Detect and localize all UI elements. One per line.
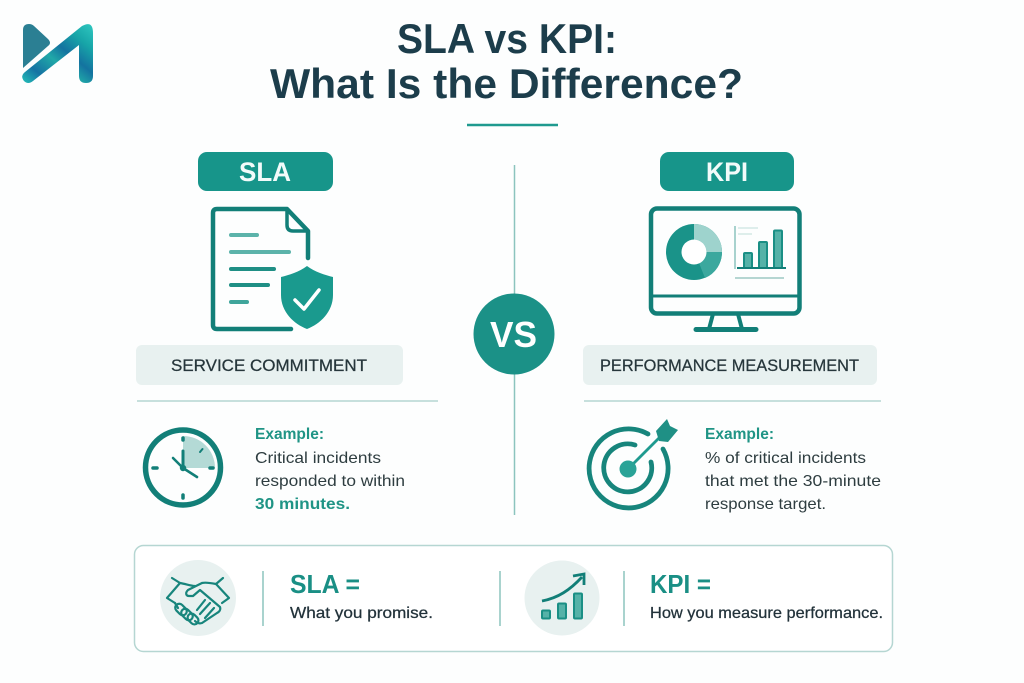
SLA definition: SLA = bbox=[290, 569, 360, 599]
icon: clock bbox=[146, 430, 220, 505]
SLA example text: Example: bbox=[255, 426, 324, 443]
KPI example text: % of critical incidents bbox=[705, 450, 866, 467]
SLA badge bbox=[198, 152, 333, 191]
KPI example text: response target. bbox=[705, 496, 826, 513]
title bbox=[270, 15, 743, 107]
icon: target with arrow bbox=[589, 419, 678, 508]
panel: summary bbox=[134, 546, 892, 652]
KPI badge bbox=[660, 152, 794, 191]
KPI badge: KPI bbox=[706, 157, 748, 187]
logo bbox=[22, 24, 93, 83]
SLA definition: What you promise. bbox=[290, 605, 433, 622]
KPI definition: KPI = bbox=[650, 569, 711, 599]
icon: growth chart bbox=[524, 560, 600, 636]
title underline bbox=[467, 124, 558, 126]
panel: SLA bbox=[136, 152, 438, 513]
label: service commitment: SERVICE COMMITMENT bbox=[171, 357, 367, 375]
KPI definition bbox=[650, 569, 883, 622]
title: What Is the Difference? bbox=[270, 60, 743, 107]
title: SLA vs KPI: bbox=[397, 15, 617, 62]
KPI example text: that met the 30-minute bbox=[705, 473, 881, 490]
KPI example text bbox=[705, 426, 881, 513]
SLA example text: Critical incidents bbox=[255, 450, 381, 467]
KPI definition: How you measure performance. bbox=[650, 605, 883, 622]
label: performance measurement bbox=[583, 345, 877, 385]
VS badge bbox=[474, 294, 554, 374]
SLA example text: 30 minutes. bbox=[255, 496, 350, 513]
label: performance measurement: PERFORMANCE MEASUREMENT bbox=[600, 357, 859, 375]
SLA example text: responded to within bbox=[255, 473, 405, 490]
SLA definition bbox=[290, 569, 433, 622]
VS badge: VS bbox=[490, 314, 537, 355]
SLA badge: SLA bbox=[239, 157, 291, 187]
icon: handshake bbox=[160, 560, 236, 636]
center divider bbox=[514, 165, 516, 515]
panel: KPI bbox=[583, 152, 881, 513]
KPI example text: Example: bbox=[705, 426, 774, 443]
SLA example text bbox=[255, 426, 405, 513]
icon: monitor dashboard bbox=[651, 208, 800, 330]
label: service commitment bbox=[136, 345, 403, 385]
icon: document with shield bbox=[213, 209, 333, 329]
